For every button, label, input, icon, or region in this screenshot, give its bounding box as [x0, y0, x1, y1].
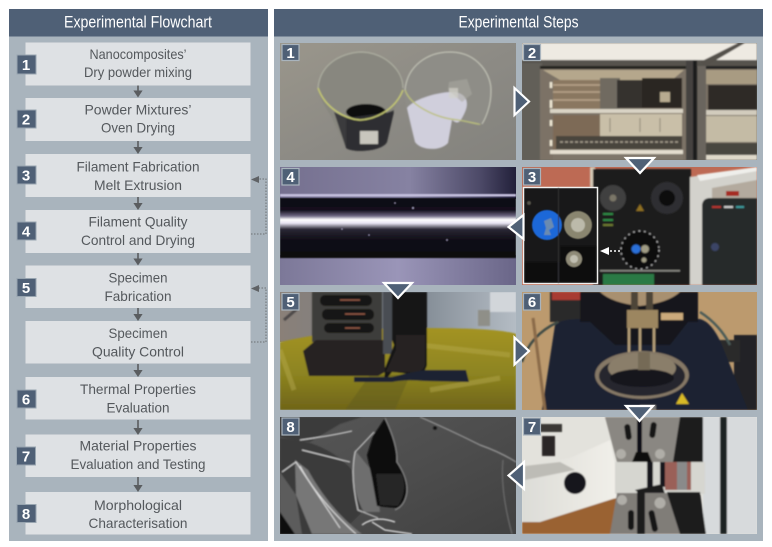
- flow step 7: Evaluation and Testing: [70, 457, 206, 472]
- photo badge 5: [282, 294, 299, 311]
- arrow: step 3 to 4: [508, 215, 524, 239]
- left beaker: [318, 52, 403, 151]
- flow step 3: Filament Fabrication: [76, 160, 200, 174]
- arrow: step 6 to 7: [626, 406, 653, 421]
- disc: [595, 351, 689, 399]
- flow step 2: Powder Mixtures’: [84, 102, 192, 118]
- step number badge 1: 1: [22, 57, 30, 74]
- step number badge 3: [17, 166, 36, 184]
- printed specimen: [354, 370, 469, 382]
- arrow: step 7 to 8: [508, 462, 524, 489]
- flow step 1: Dry powder mixing: [84, 65, 192, 80]
- photo badge 8: [282, 418, 299, 436]
- photo badge 4: [282, 168, 299, 186]
- photo 6: thermal analysis instrument: [522, 292, 757, 410]
- step number badge 5: [17, 278, 36, 297]
- step number badge 6: 6: [22, 392, 30, 408]
- feedback arrow: specimen quality to specimen fabrication: [251, 285, 266, 342]
- photo badge 5: 5: [286, 294, 295, 311]
- flow step: specimen quality control: Specimen: [108, 326, 168, 341]
- flow step 5: [26, 266, 250, 308]
- bottom grip: [667, 492, 706, 534]
- flow step 8: Characterisation: [88, 516, 188, 531]
- flow step 1: [26, 42, 250, 86]
- print head: [312, 292, 382, 342]
- step number badge 8: [17, 504, 36, 523]
- photo badge 8: 8: [286, 419, 295, 436]
- arrow: step 5 to 6: [514, 338, 529, 364]
- photo 1: beakers of powder: [280, 43, 516, 160]
- flow step 4: Filament Quality: [88, 214, 188, 230]
- step number badge 7: [16, 447, 36, 466]
- flow step 4: Control and Drying: [81, 233, 195, 248]
- flow step 3: Melt Extrusion: [94, 178, 182, 193]
- photo badge 1: 1: [286, 45, 295, 62]
- photo badge 4: 4: [286, 169, 295, 186]
- photo 7: tensile test grips: [522, 417, 757, 534]
- step number badge 4: [17, 222, 36, 240]
- panel: experimental flowchart: [9, 9, 268, 541]
- step number badge 1: [17, 55, 36, 74]
- extruder body: [593, 169, 691, 285]
- flow step 8: [26, 492, 250, 534]
- photo 3: filament extruder: [522, 167, 757, 285]
- panel: experimental steps: [274, 9, 763, 541]
- flow step 4: [26, 210, 250, 253]
- arrow: step 1 to 2: [514, 88, 529, 115]
- flow step 1: Nanocomposites’: [90, 47, 186, 62]
- photo badge 7: 7: [528, 419, 536, 436]
- right white background: [703, 417, 757, 534]
- flow step 7: [26, 434, 250, 477]
- photo 2: drying oven: [522, 43, 757, 160]
- flow step 5: Fabrication: [104, 289, 172, 304]
- heading: experimental flowchart: Experimental Flowchart: [64, 14, 212, 32]
- photo 4: filament under microscope: [280, 167, 516, 285]
- flow step 2: [26, 98, 250, 141]
- photo badge 3: 3: [528, 169, 536, 186]
- photo badge 2: [524, 44, 540, 62]
- heading: experimental steps: [274, 9, 763, 36]
- step number badge 2: [17, 110, 36, 128]
- step number badge 4: 4: [22, 224, 31, 240]
- arrow: step 2 to 3: [626, 158, 654, 173]
- instrument head: [580, 292, 698, 345]
- step number badge 2: 2: [22, 112, 30, 128]
- photo badge 1: [282, 44, 299, 62]
- photo badge 3: [524, 168, 540, 186]
- photo badge 2: 2: [528, 45, 536, 62]
- icon: white arrow to inset: [600, 247, 609, 255]
- feedback arrow: filament quality to fabrication: [251, 176, 266, 234]
- flow step: specimen quality control: Quality Control: [92, 344, 184, 360]
- flow step 2: Oven Drying: [101, 120, 175, 136]
- door: [690, 167, 757, 285]
- photo badge 6: 6: [528, 294, 536, 311]
- step number badge 6: [17, 390, 36, 408]
- photo badge 6: [524, 294, 540, 311]
- right beaker: [405, 52, 491, 149]
- photo badge 7: [524, 418, 540, 436]
- enlarged inset of extruder head: [524, 188, 598, 284]
- step number badge 3: 3: [22, 168, 30, 184]
- specimen: [647, 462, 653, 494]
- arrow: step 4 to 5: [384, 283, 412, 298]
- flow step: specimen quality control: [26, 321, 250, 364]
- step number badge 7: 7: [22, 448, 30, 466]
- flow step 6: Evaluation: [106, 400, 170, 416]
- top grip: [663, 417, 703, 462]
- flow step 6: Thermal Properties: [80, 382, 196, 397]
- flow step 8: Morphological: [94, 498, 182, 513]
- flow step 7: Material Properties: [80, 438, 197, 454]
- photo 5: 3D printing a specimen: [280, 292, 516, 410]
- step number badge 5: 5: [22, 280, 30, 297]
- photo 8: SEM fracture surface: [280, 417, 516, 534]
- flow step 6: [26, 377, 250, 420]
- flow step 3: [26, 154, 250, 197]
- heading: experimental flowchart: [9, 9, 268, 36]
- step number badge 8: 8: [22, 506, 30, 523]
- flow step 5: Specimen: [108, 270, 168, 286]
- flow arrows between steps: [133, 86, 143, 492]
- heading: experimental steps: Experimental Steps: [458, 14, 578, 32]
